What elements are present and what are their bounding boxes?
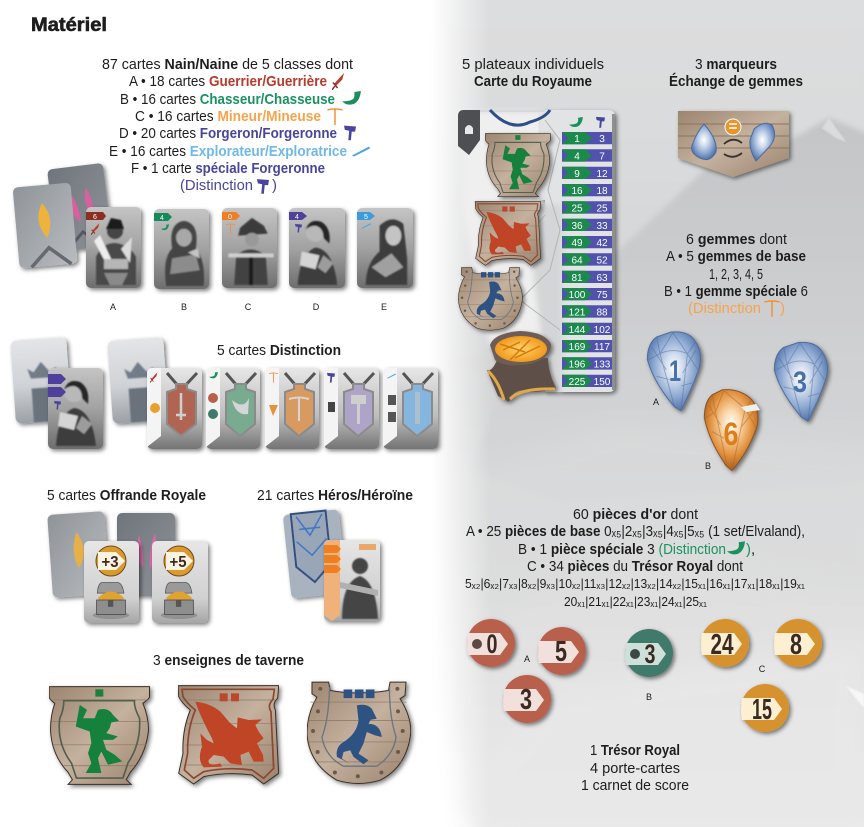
- card D: blacksmith: 4: [295, 214, 299, 221]
- score rows: 9: [574, 169, 580, 180]
- score rows: 7: [599, 152, 605, 162]
- royal offering card +3: +3: [102, 554, 119, 571]
- tavern sign: goblin: [49, 687, 149, 784]
- text block: gems: B • 1 gemme spéciale 6: [664, 283, 808, 300]
- score rows: 25: [571, 204, 583, 214]
- score rows: 75: [596, 290, 608, 301]
- icon: sword: [332, 73, 344, 90]
- coin C 15: 15: [752, 694, 772, 726]
- text block: gems: (Distinction: [688, 300, 761, 317]
- coin B special 3: [625, 629, 673, 677]
- icon: hammer: [344, 126, 356, 140]
- text block: royal treasure and accessories: 4 porte-cartes: [590, 760, 680, 777]
- icon: hammer distinction: [257, 179, 269, 194]
- card B: hunter: [154, 209, 209, 289]
- board sign: dragon: [475, 201, 541, 265]
- hero card: [324, 540, 380, 621]
- gem labels: [653, 397, 711, 471]
- score rows: 225: [569, 377, 586, 388]
- gem 3: [774, 342, 828, 421]
- text block: royal treasure and accessories: 1 Trésor Royal: [590, 742, 680, 759]
- gem 3: 3: [793, 366, 807, 399]
- text block: 87 dwarf cards list: [102, 56, 354, 194]
- heading: heroes: 21 cartes Héros/Héroïne: [257, 487, 413, 504]
- distinction card: explorer: [383, 368, 438, 449]
- text block: royal treasure and accessories: 1 carnet de score: [581, 777, 689, 794]
- card back: special blacksmith: [10, 337, 72, 424]
- coin C 8: [774, 619, 822, 667]
- heading: individual boards: 5 plateaux individuels: [462, 56, 604, 73]
- distinction card: hunter: [206, 368, 260, 449]
- card C: miner: 0: [228, 214, 232, 221]
- text block: gold coins: B • 1 pièce spéciale 3 (Distinction: [518, 541, 726, 558]
- card F: special blacksmith: [48, 368, 103, 449]
- icon: horn: [342, 91, 361, 105]
- card A: warrior: 6: [93, 214, 97, 221]
- heading: markers: Échange de gemmes: [669, 73, 803, 90]
- score rows: 117: [594, 342, 610, 353]
- score rows: 64: [571, 256, 583, 266]
- gem 6 special: [704, 390, 760, 471]
- text block: gold coins: C • 34 pièces du Trésor Royal dont: [527, 558, 744, 575]
- text block: 87 dwarf cards list: 87 cartes Nain/Naine de 5 classes dont: [102, 56, 354, 73]
- text block: gold coins: 60 pièces d'or dont: [573, 506, 699, 523]
- coin A 0: [467, 619, 515, 667]
- coin labels: B: [646, 692, 652, 702]
- score rows: 63: [596, 273, 608, 284]
- text block: 87 dwarf cards list: B • 16 cartes Chasseur/Chasseuse: [120, 91, 335, 108]
- score rows: 81: [571, 273, 583, 284]
- text block: gold coins: 20ₓ₁|21ₓ₁|22ₓ₁|23ₓ₁|24ₓ₁|25ₓ₁: [564, 594, 708, 609]
- icon: explorer blade: [352, 146, 370, 156]
- score rows: 150: [594, 377, 611, 388]
- score rows: 4: [574, 152, 580, 162]
- royal offering card +5: +5: [170, 554, 187, 571]
- card labels A to E: A: [110, 302, 116, 312]
- text block: 87 dwarf cards list: E • 16 cartes Explorateur/Exploratrice: [109, 143, 347, 160]
- card labels A to E: D: [313, 302, 320, 312]
- score rows: 36: [571, 221, 583, 232]
- icon: pickaxe: [327, 109, 343, 125]
- gold bag: [487, 331, 556, 402]
- text block: 87 dwarf cards list: ): [272, 177, 277, 194]
- tavern sign: horse: [307, 682, 411, 784]
- card labels A to E: [110, 302, 387, 312]
- card back: hero: [283, 509, 347, 599]
- coin labels: [524, 654, 766, 702]
- gem 1: 1: [669, 355, 681, 388]
- gem 1: [647, 332, 701, 411]
- heading: markers: [669, 56, 803, 90]
- score rows: 196: [569, 360, 586, 370]
- card labels A to E: C: [245, 302, 252, 312]
- score rows: 16: [571, 186, 583, 197]
- text block: gems: 6 gemmes dont: [686, 231, 788, 248]
- heading: tavern signs: 3 enseignes de taverne: [153, 652, 304, 669]
- tavern sign: dragon: [178, 686, 279, 784]
- text block: gems: [664, 231, 808, 317]
- gem 6 special: 6: [724, 416, 738, 452]
- score rows: 12: [596, 169, 608, 180]
- coin A 5: [538, 627, 586, 675]
- icon: horn distinction: [727, 541, 745, 554]
- distinction card: warrior: [147, 368, 202, 449]
- card backs: dwarf deck: [13, 163, 113, 268]
- card labels A to E: B: [181, 302, 187, 312]
- marker token: gem exchange: [678, 111, 789, 177]
- score rows: [562, 132, 612, 388]
- royal offering card +5: [152, 541, 208, 623]
- coin C 15: [741, 684, 789, 732]
- text block: gems: A • 5 gemmes de base: [666, 248, 806, 265]
- score rows: 1: [574, 134, 580, 145]
- card D: blacksmith: [289, 208, 345, 288]
- text block: royal treasure and accessories: [581, 742, 689, 794]
- score rows: 133: [594, 360, 611, 370]
- card back: royal offering pink: [117, 513, 175, 596]
- icon: hero banner: [458, 110, 480, 155]
- heading: distinction cards: 5 cartes Distinction: [217, 342, 341, 359]
- board sign: horse: [458, 268, 522, 330]
- text block: gems: ): [780, 300, 785, 317]
- score rows: 49: [571, 238, 583, 249]
- card back: distinction: [107, 337, 169, 424]
- score rows: 42: [596, 238, 608, 249]
- score rows: 52: [596, 256, 608, 266]
- text block: 87 dwarf cards list: F • 1 carte spéciale Forgeronne: [131, 160, 325, 177]
- score rows: 88: [596, 308, 608, 318]
- text block: 87 dwarf cards list: D • 20 cartes Forgeron/Forgeronne: [119, 125, 337, 142]
- title: Matériel: [31, 15, 107, 36]
- text block: gems: 1, 2, 3, 4, 5: [709, 266, 763, 283]
- player board: kingdom map: [458, 110, 615, 402]
- distinction card: miner: [265, 368, 319, 449]
- card labels A to E: E: [381, 302, 387, 312]
- coin A 0: 0: [486, 629, 498, 659]
- score rows: 102: [594, 325, 611, 336]
- board sign: goblin: [485, 133, 550, 197]
- heading: individual boards: [462, 56, 604, 90]
- text block: 87 dwarf cards list: (Distinction: [180, 177, 253, 194]
- coin A 3: 3: [520, 684, 532, 716]
- card C: miner: [222, 208, 277, 288]
- card E: explorer: [357, 208, 413, 288]
- text block: gold coins: ),: [746, 541, 755, 558]
- text block: 87 dwarf cards list: C • 16 cartes Mineur/Mineuse: [135, 108, 321, 125]
- text block: gold coins: A • 25 pièces de base 0ₓ₅|2ₓ₅|3ₓ₅|4ₓ₅|5ₓ₅ (1 set/Elvaland),: [466, 523, 805, 540]
- score rows: 144: [569, 325, 586, 336]
- class icons: hunter and blacksmith: [569, 117, 605, 128]
- card A: warrior: [86, 207, 141, 288]
- coin C 24: 24: [710, 629, 734, 661]
- score rows: 100: [569, 290, 586, 301]
- heading: individual boards: Carte du Royaume: [474, 73, 592, 90]
- score rows: 121: [569, 308, 586, 318]
- coin A 5: 5: [555, 636, 567, 668]
- coin labels: A: [524, 654, 530, 664]
- coin labels: C: [759, 664, 766, 674]
- score rows: 25: [596, 204, 608, 214]
- text block: gold coins: [465, 506, 806, 609]
- gem labels: A: [653, 397, 659, 407]
- royal offering card +3: [84, 541, 139, 623]
- card back: royal offering yellow: [47, 511, 110, 598]
- coin A 3: [503, 675, 551, 723]
- score rows: 33: [596, 221, 608, 232]
- card E: explorer: 5: [364, 214, 368, 221]
- coin C 8: 8: [790, 629, 802, 661]
- distinction card: blacksmith: [324, 368, 379, 449]
- icon: pickaxe distinction: [764, 301, 780, 317]
- gem labels: B: [705, 461, 711, 471]
- score rows: 3: [599, 134, 605, 145]
- heading: royal offering: 5 cartes Offrande Royale: [47, 487, 206, 504]
- text block: 87 dwarf cards list: A • 18 cartes Guerrier/Guerrière: [129, 73, 327, 90]
- card B: hunter: 4: [160, 215, 164, 222]
- heading: markers: 3 marqueurs: [695, 56, 777, 73]
- score rows: 18: [596, 186, 608, 197]
- score rows: 169: [569, 342, 586, 353]
- coin B special 3: 3: [644, 639, 656, 669]
- coin C 24: [701, 619, 749, 667]
- text block: gold coins: 5ₓ₂|6ₓ₂|7ₓ₃|8ₓ₂|9ₓ₃|10ₓ₂|11ₓ₃|12ₓ₂|13ₓ₂|14ₓ₂|15ₓ₁|16ₓ₁|17ₓ₁|18ₓ₁|19ₓ₁: [465, 576, 806, 591]
